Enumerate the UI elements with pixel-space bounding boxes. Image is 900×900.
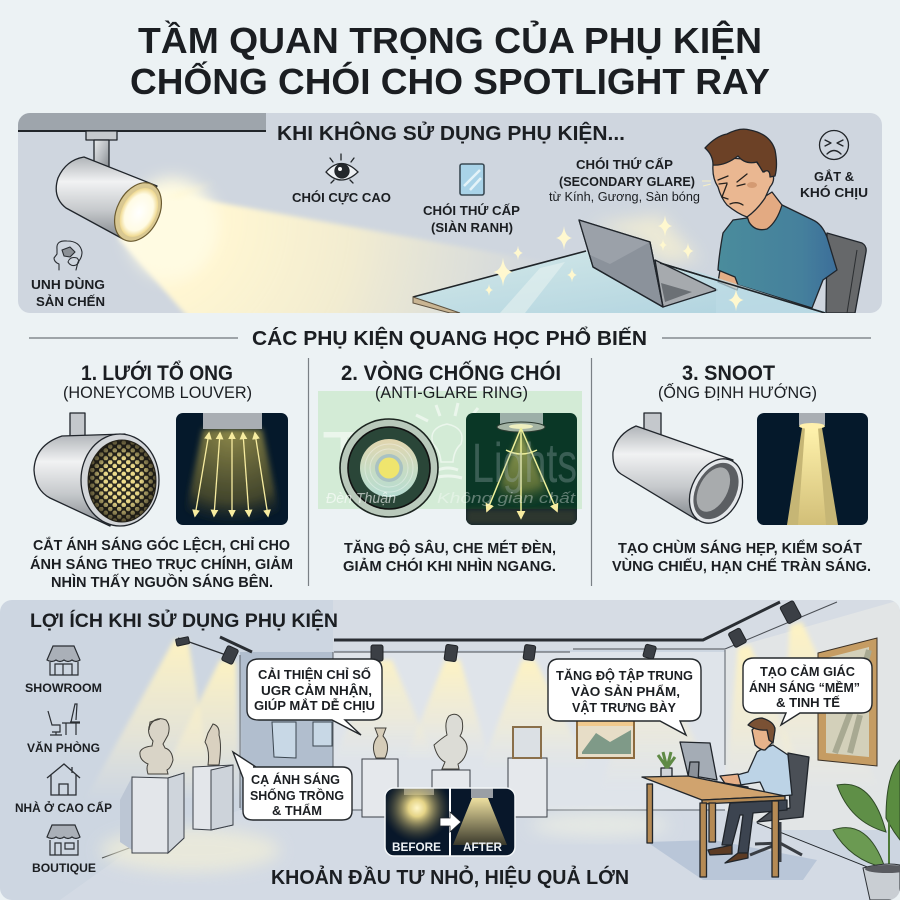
snoot lamp xyxy=(613,413,753,532)
table front over man xyxy=(660,263,825,313)
icon: mirror xyxy=(460,164,484,195)
label: irritated: GẮT & xyxy=(814,169,854,184)
callout: product focus xyxy=(548,659,701,735)
label: secondary glare explanation xyxy=(549,157,700,204)
callout: UGR comfort: CẢI THIỆN CHỈ SỐ xyxy=(258,667,371,682)
sparkles xyxy=(485,215,694,296)
label: boutique: BOUTIQUE xyxy=(32,861,96,875)
label: user fatigue: UNH DÙNG xyxy=(31,277,105,292)
heading 2: 2. VÒNG CHỐNG CHÓI xyxy=(341,361,561,385)
watermark backdrop xyxy=(318,391,582,509)
honeycomb lamp xyxy=(34,413,159,526)
icon: annoyed face xyxy=(820,130,848,160)
pedestal with torso xyxy=(193,724,233,830)
description 3: TẠO CHÙM SÁNG HẸP, KIỂM SOÁT xyxy=(618,539,862,557)
honeycomb beam diagram xyxy=(176,413,288,525)
pedestal with bust xyxy=(120,719,184,853)
panel heading: KHI KHÔNG SỬ DỤNG PHỤ KIỆN... xyxy=(277,121,625,145)
glare light beam xyxy=(116,172,504,313)
panel heading: LỢI ÍCH KHI SỬ DỤNG PHỤ KIỆN xyxy=(30,610,338,632)
title: TẦM QUAN TRỌNG CỦA PHỤ KIỆN xyxy=(138,19,762,61)
wall paintings xyxy=(577,638,877,766)
label: extreme glare: CHÓI CỰC CAO xyxy=(292,190,391,205)
ring lamp front view xyxy=(340,419,438,517)
large plant xyxy=(833,760,900,900)
pedestal with bust 2 xyxy=(432,714,470,788)
description 2: GIẢM CHÓI KHI NHÌN NGANG. xyxy=(343,557,556,575)
description 1 xyxy=(30,536,293,591)
watermark letter and bulb behind lamp: T xyxy=(322,418,366,498)
icon: head with hand xyxy=(54,241,82,270)
icon: office xyxy=(48,704,80,735)
desk xyxy=(642,776,785,877)
label: office: VĂN PHÒNG xyxy=(27,740,100,755)
desk plant xyxy=(658,752,675,779)
man squinting at glare xyxy=(702,129,837,308)
callout: soft refined feel: & TINH TẾ xyxy=(776,695,840,710)
label: showroom: SHOWROOM xyxy=(25,681,102,695)
label: luxury home: NHÀ Ở CAO CẤP xyxy=(15,800,112,815)
callout: soft refined feel: ÁNH SÁNG “MỀM” xyxy=(749,680,860,695)
watermark text: Không gian chất xyxy=(437,490,576,507)
snoot beam diagram xyxy=(757,413,868,525)
label: secondary glare surface: (SIÀN RANH) xyxy=(431,220,513,235)
callout: product focus: VẬT TRƯNG BÀY xyxy=(572,700,676,715)
laptop xyxy=(579,220,717,307)
heading 1 xyxy=(63,361,252,402)
pedestal with vase xyxy=(362,728,398,817)
pedestal with frame xyxy=(508,727,547,817)
label: secondary glare surface xyxy=(423,203,520,235)
description 3 xyxy=(612,539,871,575)
description 1: CẮT ÁNH SÁNG GÓC LỆCH, CHỈ CHO xyxy=(33,536,290,554)
office chair xyxy=(750,753,809,862)
panel: without accessories xyxy=(18,113,882,325)
label: secondary glare explanation: từ Kính, Gương, Sàn bóng xyxy=(549,189,700,204)
callout: soft refined feel xyxy=(743,658,872,725)
callout: UGR comfort xyxy=(247,659,382,735)
ring beam diagram xyxy=(466,413,577,525)
callout: UGR comfort: GIÚP MẮT DỄ CHỊU xyxy=(254,698,375,713)
glow behind laptop xyxy=(590,215,700,262)
heading 2 xyxy=(341,361,561,402)
description 3: VÙNG CHIẾU, HẠN CHẾ TRÀN SÁNG. xyxy=(612,557,871,575)
description 2: TĂNG ĐỘ SÂU, CHE MÉT ĐÈN, xyxy=(344,539,556,557)
heading 3 xyxy=(658,362,817,402)
label: irritated xyxy=(800,169,868,200)
label: secondary glare explanation: CHÓI THỨ CẤP xyxy=(576,157,673,172)
label: user fatigue: SẢN CHẾN xyxy=(36,294,105,309)
icon: eye xyxy=(326,154,358,183)
light cones xyxy=(85,622,880,872)
callout: soft refined feel: TẠO CẢM GIÁC xyxy=(760,664,856,679)
accessory 2: anti-glare ring xyxy=(322,361,577,575)
callout: UGR comfort: UGR CẢM NHẬN, xyxy=(261,683,372,698)
label: secondary glare explanation: (SECONDARY GLARE) xyxy=(559,174,695,189)
label: user fatigue xyxy=(31,277,105,309)
heading 3: (ỐNG ĐỊNH HƯỚNG) xyxy=(658,382,817,402)
watermark text: Đèn Thuận xyxy=(326,490,396,507)
callout: product focus: TĂNG ĐỘ TẬP TRUNG xyxy=(556,668,693,683)
heading 1: 1. LƯỚI TỔ ONG xyxy=(81,361,233,385)
before and after comparison: AFTER xyxy=(463,840,502,854)
computer xyxy=(680,742,748,790)
watermark text: Lights xyxy=(472,431,577,494)
title xyxy=(130,19,770,102)
before and after comparison: BEFORE xyxy=(392,840,441,854)
closing tagline: KHOẢN ĐẦU TƯ NHỎ, HIỆU QUẢ LỚN xyxy=(271,865,629,889)
watermark text xyxy=(326,431,577,507)
callout: soft light on objects xyxy=(233,752,352,820)
desk scene xyxy=(642,718,817,880)
icon: boutique xyxy=(47,825,80,855)
glass table xyxy=(413,251,830,313)
heading 3: 3. SNOOT xyxy=(682,362,775,385)
description 1: NHÌN THẤY NGUỒN SÁNG BÊN. xyxy=(51,573,273,591)
chair xyxy=(826,233,866,313)
description 2 xyxy=(343,539,556,575)
panel: optical accessories xyxy=(29,326,871,591)
gallery room xyxy=(102,600,900,867)
watermark letter and bulb behind lamp xyxy=(322,403,478,498)
floor shadow xyxy=(647,840,817,880)
list: venue types xyxy=(15,646,112,875)
description 1: ÁNH SÁNG THEO TRỤC CHÍNH, GIẢM xyxy=(30,556,293,573)
callout: soft light on objects: CẠ ÁNH SÁNG xyxy=(251,772,340,787)
before and after comparison xyxy=(384,787,516,857)
section heading: CÁC PHỤ KIỆN QUANG HỌC PHỔ BIẾN xyxy=(252,326,647,350)
callout: soft light on objects: & THẨM xyxy=(272,803,322,818)
spotlight fixture xyxy=(56,132,162,242)
title: CHỐNG CHÓI CHO SPOTLIGHT RAY xyxy=(130,60,770,102)
icon: showroom xyxy=(47,646,80,675)
callout: product focus: VÀO SẢN PHẨM, xyxy=(571,684,680,699)
label: irritated: KHÓ CHỊU xyxy=(800,185,868,200)
accessory 1: honeycomb louver xyxy=(30,361,293,591)
person at desk xyxy=(708,718,792,863)
track lights xyxy=(176,600,837,665)
ceiling rail xyxy=(18,113,266,132)
panel: benefits xyxy=(0,600,900,900)
label: secondary glare surface: CHÓI THỨ CẤP xyxy=(423,203,520,218)
icon: house xyxy=(47,764,80,795)
accessory 3: snoot xyxy=(612,362,871,575)
callout: soft light on objects: SHỐNG TRỒNG xyxy=(250,788,344,803)
heading 2: (ANTI-GLARE RING) xyxy=(375,383,528,402)
heading 1: (HONEYCOMB LOUVER) xyxy=(63,383,252,402)
